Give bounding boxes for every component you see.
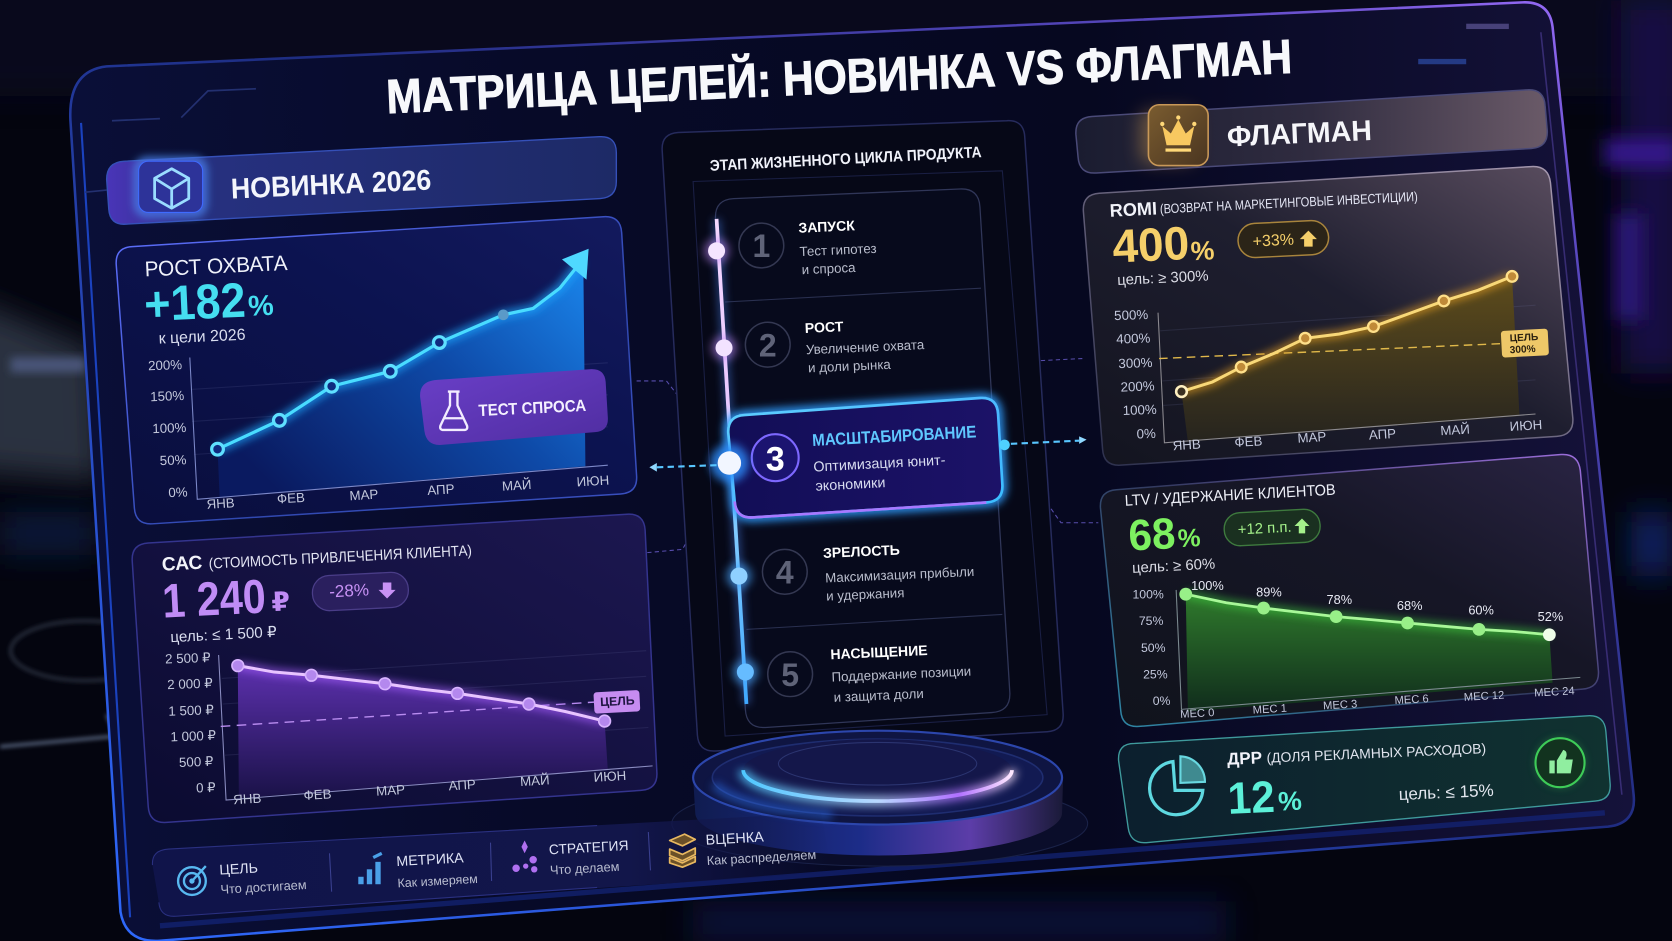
legend: strategy: Что делаем — [550, 859, 620, 878]
novelty header — [107, 137, 616, 224]
stage 3 highlighted card: экономики — [815, 475, 886, 495]
LTV value: % — [1177, 524, 1202, 553]
ROMI line chart: МАР — [1297, 429, 1327, 446]
DRR value: % — [1277, 786, 1302, 817]
icon: cube — [136, 159, 205, 215]
ROMI line chart: ФЕВ — [1234, 433, 1263, 450]
ROMI target: цель: ≥ 300% — [1117, 268, 1209, 289]
CAC value: 1 240 — [161, 570, 267, 629]
icon: thumbs up — [1536, 738, 1585, 787]
icon: crown — [1140, 105, 1208, 166]
ROMI line chart: 100% — [1122, 402, 1157, 418]
LTV line chart: 60% — [1468, 602, 1494, 617]
stage 3 highlighted card: МАСШТАБИРОВАНИЕ — [812, 422, 977, 450]
reach value: % — [247, 290, 274, 323]
CAC line chart: ИЮН — [593, 768, 627, 785]
DRR value: 12 — [1227, 772, 1276, 824]
LTV line chart: 100% — [1191, 578, 1224, 593]
ROMI line chart: 200% — [1120, 378, 1155, 395]
stage 3 highlighted card: 3 — [766, 441, 785, 479]
LTV target: цель: ≥ 60% — [1132, 556, 1216, 577]
LTV line chart: МЕС 24 — [1534, 685, 1575, 700]
legend bar — [152, 813, 832, 916]
stage dividers — [725, 288, 1002, 629]
stage 4 — [762, 542, 975, 604]
stage 4: и удержания — [826, 585, 905, 604]
stage 2 — [745, 318, 925, 375]
stage 1: и спроса — [801, 260, 856, 277]
arrow: to flagship — [1011, 436, 1087, 444]
CAC heading: САС — [161, 553, 203, 576]
reach line chart: ФЕВ — [277, 490, 305, 507]
stage 4: Максимизация прибыли — [825, 564, 975, 585]
CAC line chart: 1 000 ₽ — [170, 728, 217, 744]
CAC line chart: АПР — [448, 777, 476, 793]
stage 2: 2 — [759, 327, 777, 363]
LTV line chart: МЕС 6 — [1394, 693, 1429, 707]
legend: valuation: Как распределяем — [706, 847, 817, 868]
LTV line chart: МЕС 0 — [1180, 707, 1215, 721]
novelty label: НОВИНКА 2026 — [230, 165, 432, 206]
LTV line chart: МЕС 3 — [1323, 698, 1358, 712]
reach line chart — [148, 249, 610, 512]
CAC target tag: ЦЕЛЬ — [600, 693, 635, 709]
legend: goal: Что достигаем — [220, 877, 307, 897]
stage 5: НАСЫЩЕНИЕ — [830, 642, 928, 662]
CAC line chart: 1 500 ₽ — [168, 702, 215, 719]
reach line chart: 150% — [150, 388, 185, 404]
ROMI target tag — [1501, 329, 1549, 358]
podium — [672, 731, 1088, 866]
stage 5: и защита доли — [833, 686, 924, 705]
CAC line chart — [165, 650, 653, 807]
panel: CAC — [132, 514, 657, 822]
ROMI line chart — [1114, 271, 1549, 453]
stage 2: и доли рынка — [808, 357, 892, 375]
ROMI heading: (ВОЗВРАТ НА МАРКЕТИНГОВЫЕ ИНВЕСТИЦИИ) — [1160, 189, 1418, 217]
LTV line chart: 0% — [1153, 694, 1171, 708]
reach note: к цели 2026 — [158, 327, 246, 348]
LTV value: 68 — [1127, 509, 1177, 560]
ROMI line chart: МАЙ — [1440, 422, 1470, 438]
LTV line chart: 100% — [1132, 587, 1164, 601]
CAC line chart: 2 000 ₽ — [167, 675, 214, 692]
DRR target: цель: ≤ 15% — [1398, 781, 1494, 804]
CAC line chart: 500 ₽ — [179, 754, 214, 770]
reach line chart: МАЙ — [502, 477, 532, 494]
stage 5: 5 — [781, 657, 799, 693]
LTV line chart — [1132, 578, 1580, 721]
reach value: +182 — [143, 274, 247, 332]
title: МАТРИЦА ЦЕЛЕЙ: НОВИНКА VS ФЛАГМАН — [385, 29, 1293, 124]
ROMI line chart: 500% — [1114, 307, 1149, 323]
legend: strategy: СТРАТЕГИЯ — [548, 837, 629, 857]
panel: reach growth — [116, 217, 637, 524]
lifecycle heading: ЭТАП ЖИЗНЕННОГО ЦИКЛА ПРОДУКТА — [710, 144, 982, 175]
panel: ROMI — [1083, 167, 1573, 465]
icon: flask — [440, 392, 467, 430]
icon: pie chart — [1150, 756, 1205, 815]
legend: goal: ЦЕЛЬ — [219, 861, 258, 879]
stage 3 highlighted card — [710, 398, 1010, 517]
ROMI line chart: 0% — [1136, 426, 1156, 442]
stage 5: Поддержание позиции — [831, 664, 971, 685]
reach line chart: 0% — [168, 484, 188, 500]
panel: DRR — [1119, 716, 1610, 843]
CAC delta pill — [312, 572, 409, 612]
stage list card — [715, 189, 1010, 728]
stage 1: Тест гипотез — [799, 241, 877, 259]
legend: metric: МЕТРИКА — [396, 850, 465, 870]
connectors — [637, 359, 1098, 553]
legend: metric — [358, 850, 478, 890]
legend: metric: Как измеряем — [397, 872, 478, 890]
reach line chart: ИЮН — [576, 473, 610, 489]
LTV line chart: 68% — [1397, 598, 1422, 613]
ROMI line chart: ИЮН — [1509, 417, 1543, 434]
ROMI value: 400 — [1111, 217, 1190, 273]
stage 1: ЗАПУСК — [798, 217, 856, 236]
arrow: to novelty — [649, 463, 717, 472]
ROMI delta pill — [1237, 220, 1329, 258]
LTV heading: LTV / УДЕРЖАНИЕ КЛИЕНТОВ — [1124, 482, 1336, 510]
legend: valuation — [670, 830, 817, 868]
flagship label: ФЛАГМАН — [1226, 115, 1373, 153]
demand test button — [420, 369, 608, 445]
reach line chart: ЯНВ — [206, 495, 235, 512]
CAC line chart: 2 500 ₽ — [165, 650, 211, 667]
ROMI target tag: 300% — [1509, 344, 1536, 356]
LTV line chart: МЕС 1 — [1252, 703, 1287, 717]
ROMI heading — [1109, 189, 1418, 221]
LTV delta pill — [1223, 509, 1321, 547]
ROMI delta pill: +33% — [1252, 232, 1294, 251]
CAC line chart: МАР — [376, 782, 406, 799]
CAC line chart: МАЙ — [520, 772, 550, 789]
CAC target: цель: ≤ 1 500 ₽ — [170, 624, 277, 646]
reach line chart: 200% — [148, 357, 183, 373]
CAC line chart: ЯНВ — [233, 791, 262, 807]
LTV line chart: 78% — [1327, 592, 1352, 607]
ROMI heading: ROMI — [1109, 198, 1157, 221]
CAC heading: (СТОИМОСТЬ ПРИВЛЕЧЕНИЯ КЛИЕНТА) — [208, 542, 472, 573]
stage 1: 1 — [752, 228, 770, 264]
legend: strategy — [512, 837, 629, 878]
reach line chart: 50% — [160, 452, 187, 468]
legend: goal — [178, 861, 307, 897]
ROMI line chart: 300% — [1118, 355, 1153, 371]
stage 4: 4 — [776, 555, 794, 591]
CAC value: ₽ — [271, 586, 291, 617]
reach line chart: МАР — [349, 487, 379, 503]
stage 5 — [768, 642, 971, 705]
DRR heading: ДРР — [1227, 748, 1262, 769]
ROMI target tag: ЦЕЛЬ — [1509, 332, 1539, 344]
LTV line chart: 89% — [1256, 584, 1282, 599]
reach heading: РОСТ ОХВАТА — [144, 251, 289, 281]
stage 3 highlighted card: Оптимизация юнит- — [813, 453, 946, 476]
CAC line chart: 0 ₽ — [196, 780, 216, 796]
stage 4: ЗРЕЛОСТЬ — [823, 542, 900, 561]
LTV line chart: 52% — [1538, 609, 1563, 624]
demand test button: ТЕСТ СПРОСА — [478, 396, 587, 420]
timeline — [704, 219, 758, 704]
LTV value — [1127, 509, 1202, 560]
stage 2: Увеличение охвата — [806, 337, 925, 357]
ROMI line chart: ЯНВ — [1172, 437, 1201, 453]
flagship header — [1076, 90, 1547, 173]
stage 2: РОСТ — [805, 318, 844, 336]
ROMI line chart: АПР — [1368, 426, 1397, 443]
CAC line chart: ФЕВ — [303, 786, 332, 803]
LTV line chart: 75% — [1139, 614, 1163, 628]
panel: lifecycle stages — [662, 121, 1063, 751]
LTV delta pill: +12 п.п. — [1237, 519, 1292, 538]
legend: valuation: ВЦЕНКА — [705, 830, 765, 849]
DRR heading: (ДОЛЯ РЕКЛАМНЫХ РАСХОДОВ) — [1266, 740, 1486, 766]
CAC target tag — [593, 690, 640, 714]
ROMI value: % — [1190, 235, 1215, 266]
stage 1 — [739, 217, 877, 277]
LTV line chart: 50% — [1141, 641, 1166, 655]
reach line chart: АПР — [427, 481, 455, 498]
DRR value — [1227, 772, 1302, 824]
LTV line chart: МЕС 12 — [1464, 690, 1505, 704]
CAC heading — [161, 542, 472, 576]
ROMI line chart: 400% — [1116, 330, 1151, 347]
reach line chart: 100% — [152, 420, 187, 436]
CAC delta pill: -28% — [329, 580, 369, 601]
panel: LTV — [1100, 454, 1598, 726]
LTV line chart: 25% — [1143, 667, 1168, 681]
